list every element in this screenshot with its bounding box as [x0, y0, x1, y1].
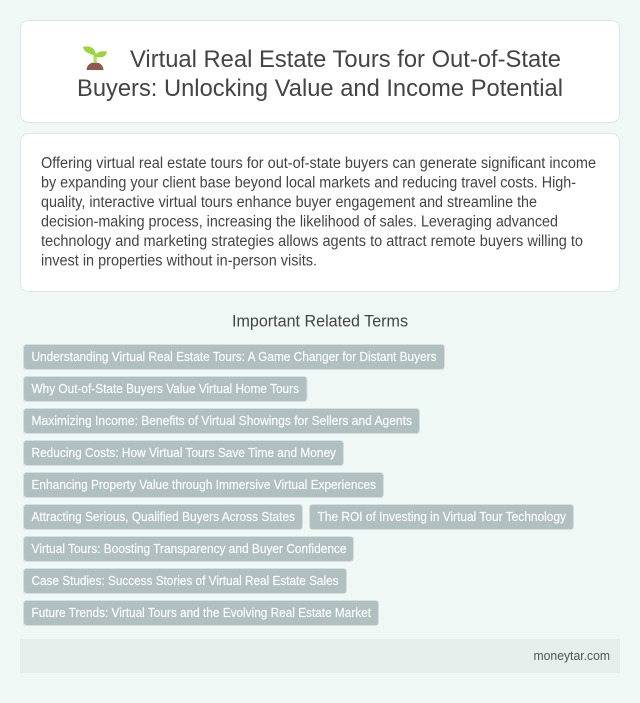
heading: related terms: Important Related Terms	[232, 312, 408, 330]
footer: moneytar.com	[534, 648, 610, 663]
text block: description: technology and marketing strategies allows agents to attract remote buyers willing to	[41, 233, 583, 250]
text block: description	[41, 155, 596, 270]
tag: ROI	[310, 504, 574, 530]
tag: enhancing property value: Enhancing Property Value through Immersive Virtual Experiences	[32, 477, 376, 492]
footer	[20, 639, 620, 673]
tag: reducing costs: Reducing Costs: How Virtual Tours Save Time and Money	[32, 445, 337, 460]
tag: future trends	[24, 600, 378, 626]
icon: seedling	[83, 46, 107, 70]
panel: title card	[20, 20, 620, 122]
title: Buyers: Unlocking Value and Income Potential	[77, 75, 563, 102]
tag: reducing costs	[24, 440, 344, 466]
tag: ROI: The ROI of Investing in Virtual Tour Technology	[318, 509, 567, 524]
tag: maximizing income: Maximizing Income: Benefits of Virtual Showings for Sellers and Agents	[32, 413, 412, 428]
title	[77, 46, 563, 102]
tag: why buyers value	[24, 376, 307, 402]
text block: description: invest in properties without in-person visits.	[41, 252, 317, 270]
tag: attracting buyers: Attracting Serious, Qualified Buyers Across States	[32, 509, 295, 524]
tag: future trends: Future Trends: Virtual Tours and the Evolving Real Estate Market	[32, 605, 371, 620]
text block: description: by expanding your client base beyond local markets and reducing travel costs. High-	[41, 174, 576, 192]
tag: maximizing income	[24, 408, 420, 434]
tag: transparency	[24, 536, 354, 562]
tag: understanding virtual tours: Understanding Virtual Real Estate Tours: A Game Changer for Distant Buyers	[32, 349, 436, 364]
text block: description: decision-making process, increasing the likelihood of sales. Leveraging advanced	[41, 214, 558, 230]
tag: case studies	[24, 568, 346, 594]
tag: why buyers value: Why Out-of-State Buyers Value Virtual Home Tours	[32, 381, 299, 396]
panel: term tags	[24, 344, 574, 626]
tag: attracting buyers	[24, 504, 302, 530]
title: Virtual Real Estate Tours for Out-of-State	[130, 46, 561, 73]
text block: description: quality, interactive virtual tours enhance buyer engagement and streamline the	[41, 194, 537, 211]
tag: enhancing property value	[24, 472, 384, 498]
tag: transparency: Virtual Tours: Boosting Transparency and Buyer Confidence	[32, 541, 346, 556]
tag: understanding virtual tours	[24, 344, 444, 370]
text block: description: Offering virtual real estate tours for out-of-state buyers can generate significant income	[41, 155, 596, 172]
tag: case studies: Case Studies: Success Stories of Virtual Real Estate Sales	[32, 573, 338, 588]
panel: intro paragraph	[20, 134, 620, 292]
